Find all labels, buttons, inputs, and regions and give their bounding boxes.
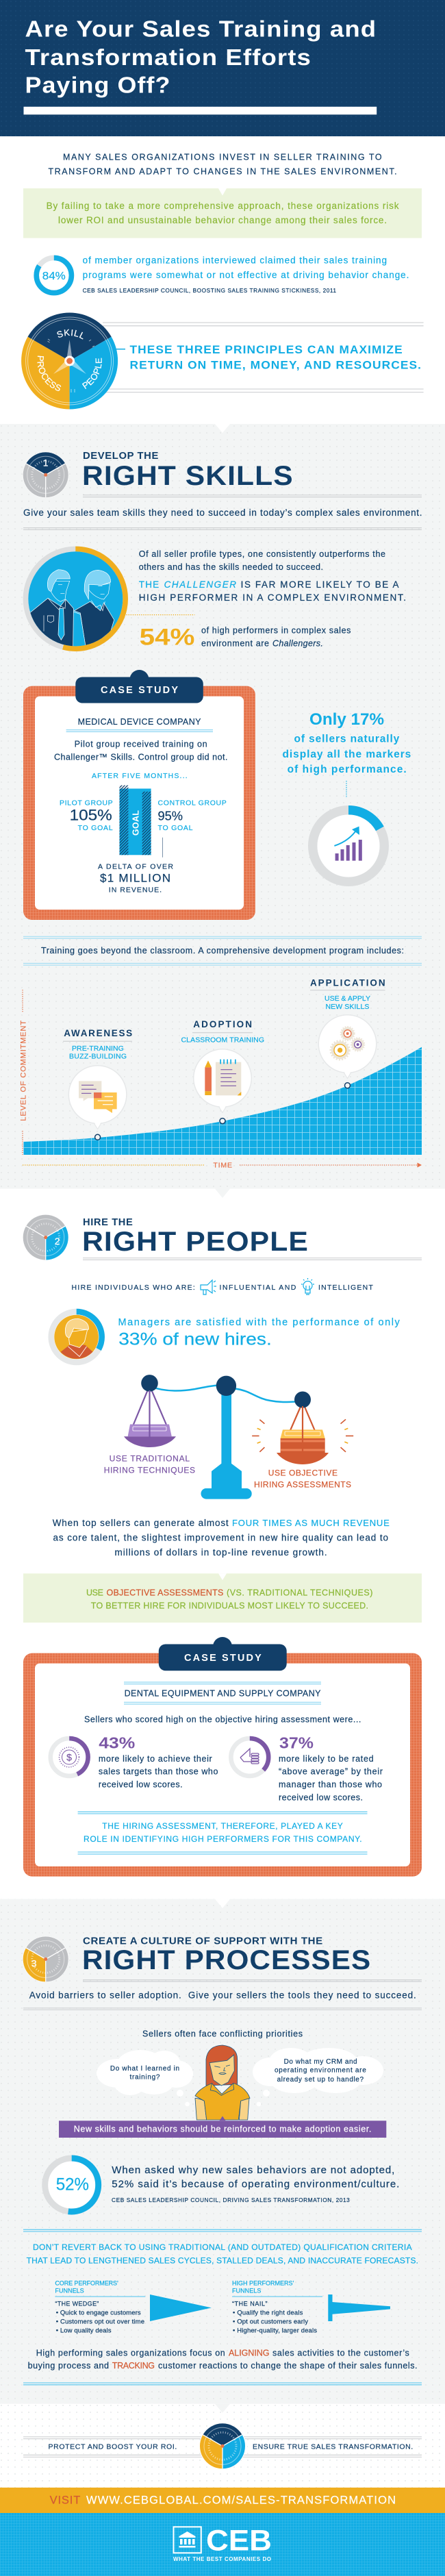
donut chart: 52% [45, 2158, 99, 2212]
pilot group stat [60, 799, 113, 832]
funnel: high performers: HIGH PERFORMERS’ [232, 2280, 294, 2287]
stat: only 17 percent: display all the markers [282, 749, 411, 760]
heading text: RIGHT PROCESSES [82, 1945, 371, 1975]
principles statement [130, 344, 422, 371]
stat: 37 percent: “above average” by their [279, 1767, 383, 1777]
goal bar [119, 785, 151, 855]
stage: application: APPLICATION [310, 978, 385, 988]
icon: wedge funnel [150, 2294, 212, 2321]
case description [54, 740, 227, 780]
panel: right skills background [0, 424, 445, 1198]
illustration: seller [195, 2045, 250, 2120]
logo: CEB [173, 2524, 272, 2562]
callout: risk statement [23, 188, 422, 238]
case description: Sellers who scored high on the objective hiring assessment were... [84, 1714, 361, 1724]
case conclusion [78, 1812, 367, 1854]
pilot group stat: 105% [70, 806, 112, 823]
alignment paragraph: sales activities to the customer’s [272, 2348, 409, 2358]
heading text [82, 451, 294, 491]
stat text [83, 255, 409, 294]
subheading: Avoid barriers to seller adoption. Give your sellers the tools they need to succeed. [29, 1990, 416, 2001]
challenger text: IS FAR MORE LIKELY TO BE A [241, 579, 398, 590]
balance scale illustration [104, 1375, 353, 1499]
right pan label [254, 1468, 351, 1490]
heading text: RIGHT PEOPLE [82, 1227, 309, 1257]
principles statement: RETURN ON TIME, MONEY, AND RESOURCES. [130, 359, 422, 371]
icon: principles wheel [21, 312, 118, 410]
revenue paragraph: FOUR TIMES AS MUCH REVENUE [232, 1518, 390, 1528]
alignment paragraph: ALIGNING [229, 2348, 270, 2358]
heading text [82, 1217, 309, 1257]
callout: objective assessments: TO BETTER HIRE FOR INDIVIDUALS MOST LIKELY TO SUCCEED. [91, 1601, 368, 1610]
control group stat: 95% [157, 809, 183, 823]
case description: Challenger™ Skills. Control group did not. [54, 752, 227, 762]
program intro text: Training goes beyond the classroom. A comprehensive development program includes: [41, 946, 404, 955]
revenue paragraph: as core talent, the slightest improvement in new hire quality can lead to [53, 1533, 388, 1542]
control group stat: CONTROL GROUP [157, 799, 227, 807]
thought bubble: crm: operating environment are [275, 2067, 366, 2075]
stat: 54 percent: 54% [140, 625, 194, 651]
panel: case study 1 [23, 670, 255, 920]
hire traits row [71, 1278, 373, 1295]
title underline bar [23, 107, 377, 114]
revenue paragraph: millions of dollars in top-line revenue growth. [115, 1547, 327, 1558]
reinforcement banner: New skills and behaviors should be reinforced to make adoption easier. [74, 2125, 371, 2134]
revenue paragraph: When top sellers can generate almost [53, 1518, 229, 1528]
title: Are Your Sales Training and [25, 16, 377, 41]
stage: awareness: PRE-TRAINING [72, 1045, 124, 1053]
stat: 84 percent [36, 255, 409, 294]
stat: 37 percent [231, 1734, 383, 1803]
stat: only 17 percent: of sellers naturally [294, 733, 400, 745]
icon: light bulb [301, 1278, 314, 1295]
stat text [112, 2164, 399, 2203]
heading text: RIGHT SKILLS [82, 461, 294, 491]
callout: risk statement: lower ROI and unsustainable behavior change among their sales force. [58, 215, 387, 225]
stat: 43 percent: received low scores. [99, 1779, 183, 1789]
closing text: ENSURE TRUE SALES TRANSFORMATION. [253, 2442, 413, 2451]
callout: risk statement: By failing to take a more comprehensive approach, these organizations risk [47, 201, 399, 211]
thought bubble: training: training? [130, 2074, 160, 2081]
funnel: core performers [55, 2280, 212, 2334]
title: Paying Off? [25, 73, 171, 98]
company heading [124, 1682, 321, 1704]
alignment paragraph: TRACKING [112, 2361, 155, 2371]
case study tab: CASE STUDY [101, 685, 178, 696]
area chart: commitment over time [19, 978, 422, 1170]
icon: thumbs up [240, 1749, 259, 1764]
x axis label [23, 1162, 422, 1170]
revenue delta [98, 863, 173, 895]
case study tab [159, 1637, 287, 1671]
stage: awareness: BUZZ-BUILDING [69, 1053, 127, 1061]
conflicting priorities illustration [97, 2029, 383, 2120]
call to action bar [0, 2488, 445, 2513]
alignment paragraph: buying process and [28, 2361, 109, 2371]
donut chart: 17% [313, 810, 384, 881]
callout: objective assessments: (VS. TRADITIONAL TECHNIQUES) [227, 1588, 372, 1597]
stat text: CEB SALES LEADERSHIP COUNCIL, BOOSTING SALES TRAINING STICKINESS, 2011 [83, 287, 336, 294]
icon: chat bubbles [79, 1081, 117, 1113]
stat text: Managers are satisfied with the performance of only [118, 1317, 400, 1328]
revenue paragraph [53, 1518, 390, 1558]
icon: wheel 1 [23, 452, 68, 498]
alignment paragraph: High performing sales organizations focus on [36, 2348, 225, 2358]
thought bubble: training [97, 2050, 193, 2106]
funnel: core performers: • Customers opt out over time [56, 2318, 144, 2325]
subheading: Give your sales team skills they need to succeed in today’s complex sales environment. [23, 508, 422, 518]
header banner [0, 0, 445, 136]
funnel: core performers: • Quick to engage customers [56, 2310, 141, 2317]
thought bubble: crm [253, 2048, 383, 2106]
stage: application: NEW SKILLS [326, 1003, 369, 1011]
left pan label: USE TRADITIONAL [110, 1454, 190, 1464]
footer [0, 2513, 445, 2576]
stat: 54 percent: Challengers. [272, 638, 323, 648]
icon: wheel 3 [23, 1936, 68, 1982]
stat text: 52% said it’s because of operating environment/culture. [112, 2179, 399, 2190]
conflicting priorities illustration: Sellers often face conflicting priorities [142, 2029, 303, 2038]
funnel: high performers: “THE NAIL” [232, 2300, 267, 2307]
closing text: PROTECT AND BOOST YOUR ROI. [48, 2442, 177, 2451]
thought bubble: crm: Do what my CRM and [284, 2058, 357, 2066]
stat: 54 percent: environment are [201, 638, 269, 648]
funnel: high performers: • Opt out customers early [233, 2318, 308, 2325]
stat: 37 percent: 37% [279, 1734, 314, 1752]
three principles block [21, 312, 424, 410]
funnel: core performers: FUNNELS [55, 2288, 84, 2294]
stat: only 17 percent: Only 17% [309, 710, 384, 729]
section 2 heading [23, 1214, 422, 1260]
left pan: traditional techniques [124, 1375, 176, 1447]
pilot group stat: TO GOAL [78, 824, 113, 832]
company heading: DENTAL EQUIPMENT AND SUPPLY COMPANY [125, 1689, 321, 1699]
case description: AFTER FIVE MONTHS... [92, 772, 188, 780]
icon: dollar coin [59, 1747, 79, 1767]
challenger text: Of all seller profile types, one consistently outperforms the [139, 549, 385, 559]
stage: application: USE & APPLY [325, 995, 370, 1003]
challenger portrait [25, 549, 125, 649]
logo: CEB: WHAT THE BEST COMPANIES DO [173, 2556, 271, 2562]
heading text: CREATE A CULTURE OF SUPPORT WITH THE [83, 1936, 323, 1947]
right pan label: HIRING ASSESSMENTS [254, 1480, 351, 1490]
logo: CEB: CEB [206, 2524, 272, 2557]
stage: adoption: ADOPTION [193, 1019, 252, 1029]
icon: wheel 2 [23, 1214, 68, 1260]
heading text: DEVELOP THE [83, 451, 159, 462]
stat: 43 percent [51, 1734, 218, 1789]
stat text: 33% of new hires. [118, 1330, 272, 1349]
case conclusion: ROLE IN IDENTIFYING HIGH PERFORMERS FOR THIS COMPANY. [84, 1834, 362, 1844]
stat text [118, 1317, 400, 1349]
program intro text [23, 936, 422, 965]
intro text: TRANSFORM AND ADAPT TO CHANGES IN THE SALES ENVIRONMENT. [48, 167, 397, 177]
stat: 54 percent: of high performers in complex sales [201, 626, 351, 636]
stage: adoption [181, 1019, 264, 1124]
icon: gears [331, 1027, 364, 1059]
stage: application [310, 978, 385, 1088]
donut chart: 52%: 52% [56, 2175, 89, 2194]
stat text: When asked why new sales behaviors are not adopted, [112, 2164, 394, 2176]
title: Transformation Efforts [25, 45, 312, 70]
icon: wheel 3: 3 [31, 1958, 37, 1968]
stat text: of member organizations interviewed claimed their sales training [83, 255, 387, 266]
stat: only 17 percent: of high performance. [288, 764, 407, 775]
icon: principles wheel: SKILL [57, 329, 84, 340]
thought bubble: training: Do what I learned in [110, 2065, 179, 2073]
funnel: high performers: • Qualify the right deals [233, 2310, 303, 2317]
scale stand [149, 1376, 303, 1499]
callout: objective assessments: USE [86, 1588, 103, 1597]
stat: 33 percent of new hires [51, 1312, 400, 1363]
section 1 heading [23, 451, 422, 529]
stat: 43 percent: more likely to achieve their [99, 1754, 212, 1764]
qualification warning [23, 2229, 422, 2265]
reinforcement banner [59, 2116, 386, 2138]
call to action bar: VISIT [50, 2494, 80, 2507]
funnel: high performers: FUNNELS [232, 2288, 261, 2294]
pilot group stat: PILOT GROUP [60, 799, 113, 807]
donut chart: 84%: 84% [42, 271, 66, 282]
icon: dollar coin: $ [66, 1752, 72, 1763]
funnel: core performers: • Low quality deals [56, 2327, 112, 2334]
stat: 52 percent [45, 2158, 399, 2212]
panel: right processes background [0, 1899, 445, 2404]
icon: nail funnel [328, 2294, 390, 2321]
stat text: CEB SALES LEADERSHIP COUNCIL, DRIVING SALES TRANSFORMATION, 2013 [112, 2197, 350, 2203]
icon: pencil and notepad [205, 1060, 241, 1095]
funnel: core performers: “THE WEDGE” [55, 2300, 99, 2307]
control group stat: TO GOAL [157, 824, 193, 832]
challenger text: THE [139, 579, 159, 590]
control group stat [157, 799, 227, 858]
stat: 37 percent: more likely to be rated [279, 1754, 374, 1764]
stat: 54 percent [140, 625, 351, 651]
closing band [0, 2404, 445, 2488]
funnel: high performers: • Higher-quality, larger deals [233, 2327, 317, 2334]
funnel: core performers: CORE PERFORMERS’ [55, 2280, 118, 2287]
case conclusion: THE HIRING ASSESSMENT, THEREFORE, PLAYED A KEY [102, 1821, 343, 1831]
icon: wheel 2: 2 [55, 1236, 60, 1247]
callout: objective assessments [23, 1573, 422, 1623]
call to action bar: WWW.CEBGLOBAL.COM/SALES-TRANSFORMATION [86, 2494, 396, 2507]
section 3 heading [23, 1936, 422, 2010]
revenue delta: IN REVENUE. [109, 886, 162, 895]
right pan: objective assessments [252, 1392, 353, 1464]
stat: 37 percent: manager than those who [279, 1779, 382, 1789]
left pan label: HIRING TECHNIQUES [104, 1466, 195, 1475]
icon: growth bars and arrow [334, 826, 362, 861]
icon: wheel 1: 1 [43, 457, 49, 468]
alignment paragraph [23, 2348, 422, 2385]
stat: 43 percent: sales targets than those who [99, 1767, 218, 1777]
stage: adoption: CLASSROOM TRAINING [181, 1036, 264, 1044]
stat: 37 percent: received low scores. [279, 1793, 363, 1803]
qualification warning: DON’T REVERT BACK TO USING TRADITIONAL (AND OUTDATED) QUALIFICATION CRITERIA [33, 2242, 412, 2252]
stage: awareness [63, 1028, 132, 1140]
funnel: high performers [232, 2280, 390, 2334]
stat text: programs were somewhat or not effective at driving behavior change. [83, 270, 409, 280]
x axis label: TIME [213, 1162, 232, 1170]
icon: principles wheel: PROCESS [37, 356, 62, 391]
stat: only 17 percent [282, 710, 411, 881]
revenue delta: A DELTA OF OVER [98, 863, 173, 871]
case study tab: CASE STUDY [184, 1653, 262, 1664]
donut chart: 84% [36, 258, 71, 293]
heading text: HIRE THE [83, 1217, 133, 1228]
title [25, 16, 377, 98]
alignment paragraph: customer reactions to change the shape of their sales funnels. [158, 2361, 418, 2371]
principles statement: THESE THREE PRINCIPLES CAN MAXIMIZE [130, 344, 403, 356]
hire traits row: HIRE INDIVIDUALS WHO ARE: [71, 1284, 195, 1292]
intro text: MANY SALES ORGANIZATIONS INVEST IN SELLER TRAINING TO [63, 153, 382, 162]
y axis label: LEVEL OF COMMITMENT [19, 1021, 27, 1121]
challenger text [139, 549, 406, 603]
intro text [48, 153, 397, 177]
manager portrait donut [51, 1312, 102, 1363]
icon: principles wheel: PEOPLE [82, 358, 102, 389]
icon: megaphone [201, 1280, 216, 1295]
challenger text: CHALLENGER [164, 579, 236, 590]
company heading: MEDICAL DEVICE COMPANY [78, 717, 201, 727]
right pan label: USE OBJECTIVE [268, 1468, 338, 1478]
left pan label [104, 1454, 195, 1475]
challenger text: HIGH PERFORMER IN A COMPLEX ENVIRONMENT. [139, 592, 406, 603]
panel: case study 2 [23, 1637, 422, 1877]
stat: 43 percent: 43% [99, 1734, 135, 1752]
case study tab [75, 670, 203, 703]
closing text [48, 2442, 413, 2451]
hire traits row: INTELLIGENT [318, 1284, 373, 1292]
icon: full wheel [199, 2423, 246, 2469]
goal bar: GOAL [131, 810, 140, 836]
callout: objective assessments: OBJECTIVE ASSESSMENTS [107, 1588, 223, 1597]
case description: Pilot group received training on [75, 740, 207, 749]
thought bubble: crm: already set up to handle? [277, 2076, 364, 2084]
challenger text: others and has the skills needed to succeed. [139, 562, 323, 572]
qualification warning: THAT LEAD TO LENGTHENED SALES CYCLES, STALLED DEALS, AND INACCURATE FORECASTS. [27, 2255, 418, 2265]
stage: awareness: AWARENESS [64, 1028, 132, 1038]
hire traits row: INFLUENTIAL AND [219, 1284, 296, 1292]
revenue delta: $1 MILLION [100, 871, 170, 885]
